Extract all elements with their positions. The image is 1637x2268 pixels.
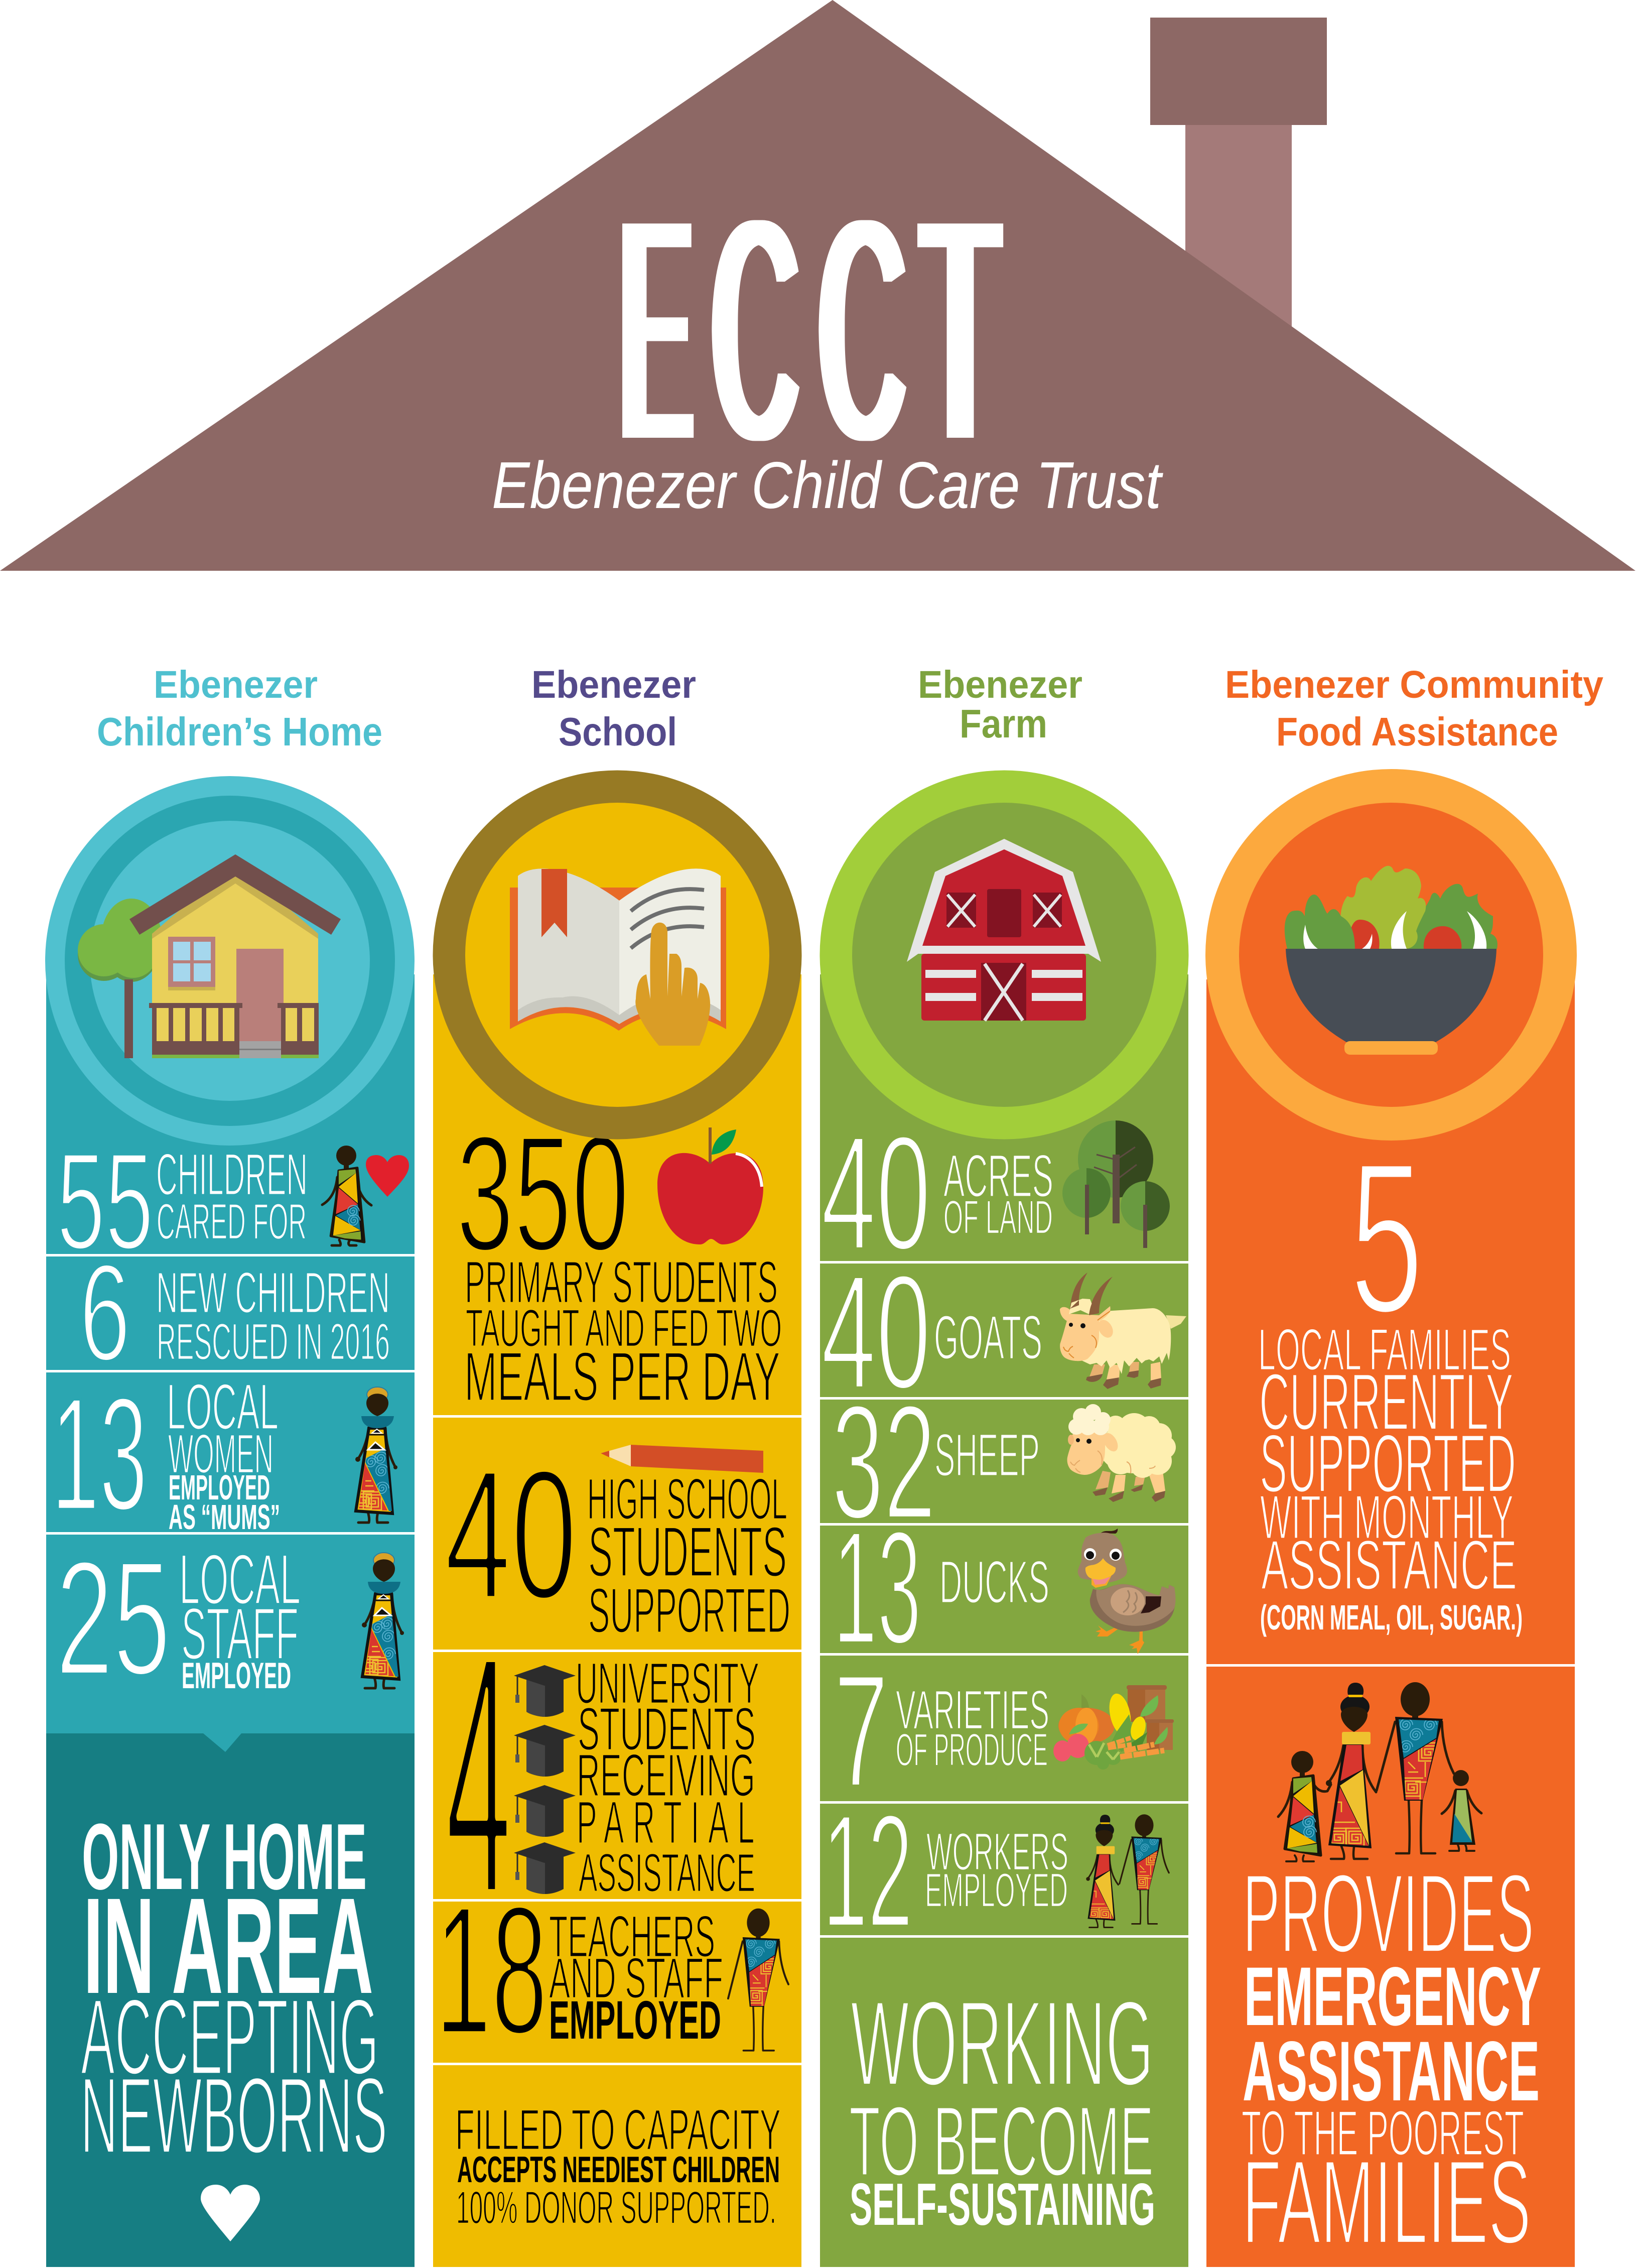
stat: 55 children [57, 1124, 308, 1279]
title: ECCT: C [817, 146, 908, 515]
icon: graduation caps [514, 1665, 576, 1894]
stat: 7 varieties of produce [834, 1641, 1049, 1821]
stat: 6 new children [79, 1235, 390, 1390]
stat: 4 university students: ASSISTANCE [579, 1842, 755, 1904]
panel: Farm [820, 770, 1188, 2267]
stat: 25 local staff: STAFF [181, 1593, 299, 1675]
stat: 18 teachers and staff: EMPLOYED [549, 1989, 721, 2050]
stat: 5 local families [1258, 1116, 1523, 1637]
heading: Ebenezer School: School [559, 709, 677, 754]
icon: trees [1062, 1120, 1170, 1248]
badge: farm circle [820, 770, 1188, 1140]
stat: 18 teachers and staff: TEACHERS [549, 1904, 715, 1970]
text: provides emergency assistance [1242, 1851, 1541, 2268]
badge: food circle [1205, 769, 1577, 1141]
callout: only home accepting newborns: ONLY HOME [82, 1804, 367, 1909]
stat: 55 children: CARED FOR [157, 1194, 307, 1250]
stat: 18 teachers and staff: AND STAFF [549, 1946, 723, 2010]
stat: 13 local women: 13 [51, 1364, 148, 1545]
stat: 40 goats: GOATS [934, 1303, 1042, 1372]
stat: 40 high school students [445, 1431, 790, 1646]
title: ECCT: C [711, 146, 801, 515]
title: ECCT: E [619, 146, 694, 515]
stat: 350 primary students: TAUGHT AND FED TWO [466, 1299, 782, 1358]
stat: 40 acres of land: OF LAND [943, 1191, 1053, 1244]
panel: Community Food Assistance [1205, 769, 1577, 2268]
icon: workers [1086, 1814, 1169, 1928]
heading: Ebenezer Community Food Assistance: Ebenezer Community [1225, 663, 1603, 706]
stat: 6 new children: 6 [79, 1235, 130, 1390]
text: working to become self-sustaining [849, 1976, 1155, 2238]
heading: Ebenezer Children's Home [97, 663, 382, 754]
stat: 4 university students: STUDENTS [578, 1695, 756, 1763]
icon: family [1278, 1682, 1481, 1861]
stat: 25 local staff: LOCAL [179, 1540, 301, 1619]
icon: red heart [366, 1155, 409, 1197]
icon: apple [657, 1127, 763, 1244]
icon: open book with hand [510, 868, 726, 1046]
panel: School: HIGH SCHOOL [587, 1466, 787, 1532]
icon: goat [1060, 1273, 1186, 1389]
icon: house and tree [78, 854, 341, 1058]
stat: 55 children: CHILDREN [156, 1142, 308, 1208]
badge: home circle [45, 776, 415, 1146]
stat: 40 goats: 40 [821, 1241, 931, 1424]
title: ECCT [619, 146, 1001, 515]
icon: teacher figure [728, 1909, 788, 2051]
icon: child figure [322, 1146, 371, 1245]
text: filled to capacity: FILLED TO CAPACITY [455, 2098, 781, 2162]
stat: 4 university students: RECEIVING [577, 1741, 755, 1809]
icon: staff figure [360, 1553, 404, 1688]
stat: 5 local families: 5 [1349, 1116, 1424, 1359]
text: filled to capacity: ACCEPTS NEEDIEST CHILDREN [457, 2150, 780, 2190]
roof [0, 0, 1635, 571]
heading: Ebenezer School: Ebenezer [531, 663, 696, 706]
icon: pencil [601, 1445, 763, 1473]
stat: 18 teachers and staff: 18 [435, 1867, 548, 2073]
stat: 12 workers employed: EMPLOYED [925, 1863, 1068, 1917]
stat: 4 university students: 4 [446, 1583, 511, 1966]
stat: 6 new children: NEW CHILDREN [156, 1260, 390, 1325]
heading: Ebenezer Farm: Farm [960, 701, 1047, 746]
icon: sheep [1067, 1404, 1176, 1502]
stat: 40 high school students: SUPPORTED [588, 1575, 790, 1646]
text: working to become self-sustaining: TO BECOME [849, 2086, 1154, 2197]
callout: only home accepting newborns: NEWBORNS [80, 2055, 387, 2176]
stat: 13 local women: WOMEN [168, 1423, 274, 1485]
heading: Ebenezer Children's Home: Ebenezer [154, 663, 318, 706]
callout: only home accepting newborns: ACCEPTING [81, 1976, 379, 2097]
stat: 12 workers employed: 12 [823, 1781, 913, 1961]
stat: 350 primary students [456, 1101, 782, 1416]
stat: 40 acres of land: 40 [821, 1102, 931, 1285]
heading: Ebenezer Children's Home: Children’s Home [97, 709, 382, 754]
stat: 40 acres of land: ACRES [943, 1142, 1053, 1210]
stat: 12 workers employed: WORKERS [926, 1822, 1068, 1881]
callout: only home accepting newborns [46, 1733, 415, 2267]
icon: white heart [201, 2185, 260, 2241]
callout: only home accepting newborns: IN AREA [83, 1869, 373, 2022]
stat: 40 high school students: STUDENTS [588, 1512, 787, 1592]
stat: 7 varieties of produce: 7 [834, 1641, 889, 1821]
stat: 13 local women: AS “MUMS” [169, 1497, 280, 1537]
panel: School [433, 770, 802, 2267]
stat: 25 local staff: EMPLOYED [182, 1656, 291, 1696]
icon: salad bowl [1285, 866, 1497, 1055]
panel: Farm: OF PRODUCE [896, 1724, 1048, 1776]
stat: 13 ducks: DUCKS [939, 1548, 1049, 1616]
icon: produce [1053, 1685, 1174, 1770]
stat: 350 primary students: MEALS PER DAY [464, 1338, 780, 1416]
heading: Ebenezer Farm [918, 663, 1082, 746]
chimney [1150, 18, 1327, 361]
text: filled to capacity: 100% DONOR SUPPORTED. [456, 2182, 776, 2233]
stat: 6 new children: RESCUED IN 2016 [157, 1313, 390, 1370]
heading: Ebenezer Farm: Ebenezer [918, 663, 1082, 706]
text: working to become self-sustaining: WORKING [851, 1976, 1154, 2111]
icon: barn [907, 839, 1101, 1021]
heading: Ebenezer Community Food Assistance: Food Assistance [1276, 709, 1558, 754]
stat: 13 ducks: 13 [833, 1497, 921, 1678]
stat: 7 varieties of produce: VARIETIES [896, 1679, 1049, 1741]
subtitle: Ebenezer Child Care Trust: Ebenezer Child Care Trust [492, 448, 1164, 522]
stat: 4 university students: PARTIAL [577, 1788, 763, 1856]
stat: 40 high school students: 40 [445, 1431, 577, 1637]
stat: 350 primary students: 350 [456, 1101, 629, 1286]
stat: 4 university students [446, 1583, 763, 1966]
stat: 32 sheep: SHEEP [934, 1421, 1040, 1489]
stat: 4 university students: UNIVERSITY [576, 1651, 759, 1716]
panel: Children's Home [45, 776, 415, 2267]
stat: 32 sheep: 32 [832, 1371, 936, 1554]
stat: 13 local women: EMPLOYED [169, 1468, 270, 1507]
text: T [920, 146, 1001, 515]
icon: duck [1078, 1529, 1175, 1654]
heading: Ebenezer Community Food Assistance [1225, 663, 1603, 754]
text: working to become self-sustaining: SELF-SUSTAINING [850, 2171, 1155, 2238]
stat: 13 local women: LOCAL [167, 1370, 279, 1443]
icon: woman figure [353, 1387, 397, 1523]
heading: Ebenezer School [531, 663, 696, 754]
stat: 55 children: 55 [57, 1124, 154, 1279]
stat: 350 primary students: PRIMARY STUDENTS [465, 1249, 778, 1316]
badge: school circle [433, 770, 802, 1140]
text: filled to capacity [455, 2098, 781, 2233]
stat: 25 local staff: 25 [56, 1527, 171, 1710]
